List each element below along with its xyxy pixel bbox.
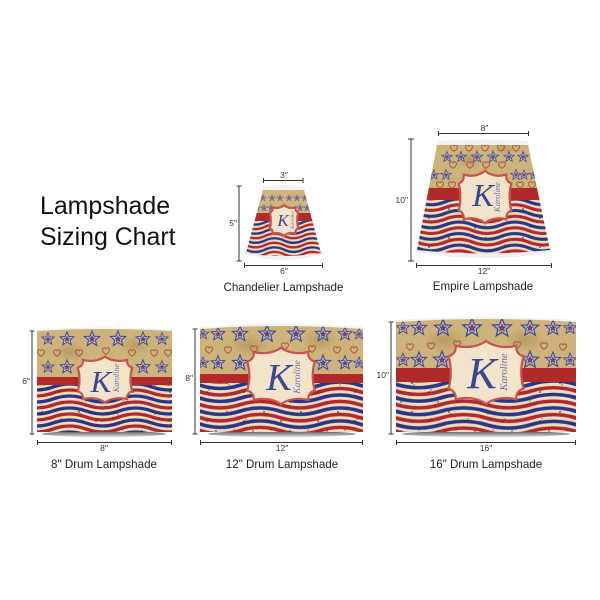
dimension: height 10 inches: 10" bbox=[377, 370, 389, 380]
lampshade photo: 12 inch drum: K bbox=[265, 357, 293, 399]
caption: chandelier: Chandelier Lampshade bbox=[224, 281, 343, 294]
infographic canvas bbox=[22, 125, 576, 470]
lampshade photo: empire bbox=[410, 140, 560, 259]
lampshade photo: 8 inch drum bbox=[37, 328, 172, 437]
lampshade photo: 12 inch drum: Karoline bbox=[293, 360, 303, 395]
dimension: height 8 inches bbox=[185, 329, 198, 434]
caption: 12 inch drum: 12" Drum Lampshade bbox=[226, 458, 338, 471]
dimension: bottom 12 inches: 12" bbox=[478, 266, 490, 276]
lampshade photo: chandelier: Karoline bbox=[291, 210, 296, 230]
lampshade photo: chandelier bbox=[244, 185, 324, 260]
dimension: width 8 inches bbox=[37, 440, 172, 453]
panel: 8 inch drum lampshade bbox=[22, 325, 180, 471]
dimension: height 6 inches bbox=[22, 331, 34, 434]
panel: 16 inch drum lampshade bbox=[377, 315, 580, 471]
panel: chandelier lampshade bbox=[224, 170, 343, 294]
panel: empire lampshade bbox=[396, 123, 560, 293]
dimension: width 12 inches bbox=[200, 440, 363, 453]
title: Lampshade bbox=[40, 192, 170, 220]
caption: 16 inch drum: 16" Drum Lampshade bbox=[430, 458, 542, 471]
dimension: height 10 inches bbox=[377, 322, 394, 434]
lampshade photo: empire: K bbox=[471, 177, 495, 213]
lampshade photo: 8 inch drum: K bbox=[90, 364, 114, 399]
dimension: height 6 inches: 6" bbox=[22, 376, 30, 386]
dimension: width 16 inches bbox=[396, 440, 576, 453]
dimension: width 8 inches: 8" bbox=[100, 443, 108, 453]
dimension: height 8 inches: 8" bbox=[185, 373, 193, 383]
lampshade photo: 8 inch drum: Karoline bbox=[112, 363, 121, 393]
lampshade photo: 12 inch drum bbox=[200, 324, 363, 437]
dimension: width 16 inches: 16" bbox=[480, 443, 492, 453]
dimension: top 3 inches: 3" bbox=[280, 170, 288, 180]
lampshade photo: 16 inch drum: K bbox=[466, 349, 499, 398]
lampshade photo: empire: Karoline bbox=[492, 182, 502, 213]
lampshade photo: 16 inch drum bbox=[390, 315, 580, 437]
dimension: height 5 inches: 5" bbox=[229, 218, 237, 228]
panel: 12 inch drum lampshade bbox=[185, 320, 370, 471]
lampshade photo: 16 inch drum: Karoline bbox=[499, 353, 510, 391]
dimension: bottom 6 inches: 6" bbox=[280, 266, 288, 276]
title: Sizing Chart bbox=[40, 223, 176, 251]
dimension: width 12 inches: 12" bbox=[276, 443, 288, 453]
dimension: top 8 inches: 8" bbox=[481, 123, 488, 133]
dimension: top 8 inches bbox=[438, 123, 529, 136]
dimension: height 10 inches: 10" bbox=[396, 195, 408, 205]
caption: empire: Empire Lampshade bbox=[433, 280, 533, 293]
dimension: bottom 12 inches bbox=[416, 263, 552, 276]
lampshade photo: chandelier: K bbox=[276, 211, 290, 230]
dimension: height 10 inches bbox=[396, 139, 414, 261]
caption: 8 inch drum: 8" Drum Lampshade bbox=[51, 458, 157, 471]
